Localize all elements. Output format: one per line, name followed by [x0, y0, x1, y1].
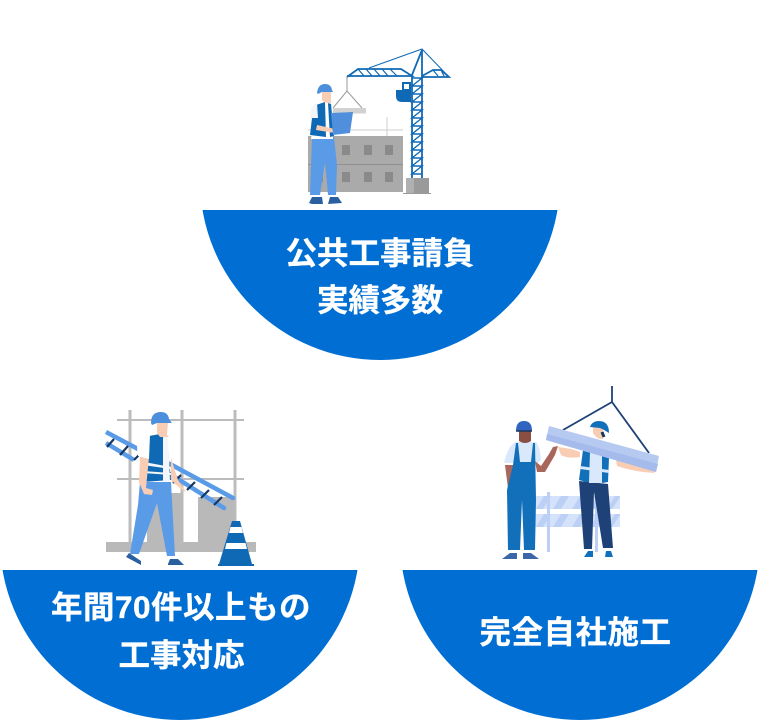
panel: public works semicircle: 実績多数 [317, 282, 443, 318]
panel: seventy jobs semicircle: 工事対応 [118, 637, 245, 673]
crane counterweight cab [396, 82, 411, 102]
heading: public works record: 公共工事請負 [285, 235, 475, 271]
worker with ladder [106, 412, 233, 565]
building [308, 117, 403, 192]
striped barricade [535, 492, 620, 552]
steel beam [546, 426, 659, 472]
panel: seventy jobs semicircle [2, 570, 358, 720]
icon: workers lifting beam illustration [502, 386, 659, 559]
worker holding plan [309, 84, 353, 204]
scaffold [117, 410, 244, 542]
worker in vest [558, 421, 655, 557]
heading: in-house construction: 完全自社施工 [479, 614, 672, 650]
crane hook and panel [333, 77, 366, 114]
traffic cone [218, 521, 254, 565]
tower crane [347, 49, 449, 178]
panel: in-house construction semicircle [402, 570, 758, 720]
crane cables [563, 386, 649, 453]
icon: worker carrying ladder illustration [106, 410, 256, 565]
heading: yearly jobs: 年間70件以上もの [51, 589, 311, 625]
panel: public works semicircle [202, 210, 558, 360]
icon: architect and tower crane illustration [308, 49, 449, 204]
crane base block [403, 178, 431, 194]
worker in overalls [502, 421, 558, 559]
concrete walls and ground [106, 493, 256, 552]
